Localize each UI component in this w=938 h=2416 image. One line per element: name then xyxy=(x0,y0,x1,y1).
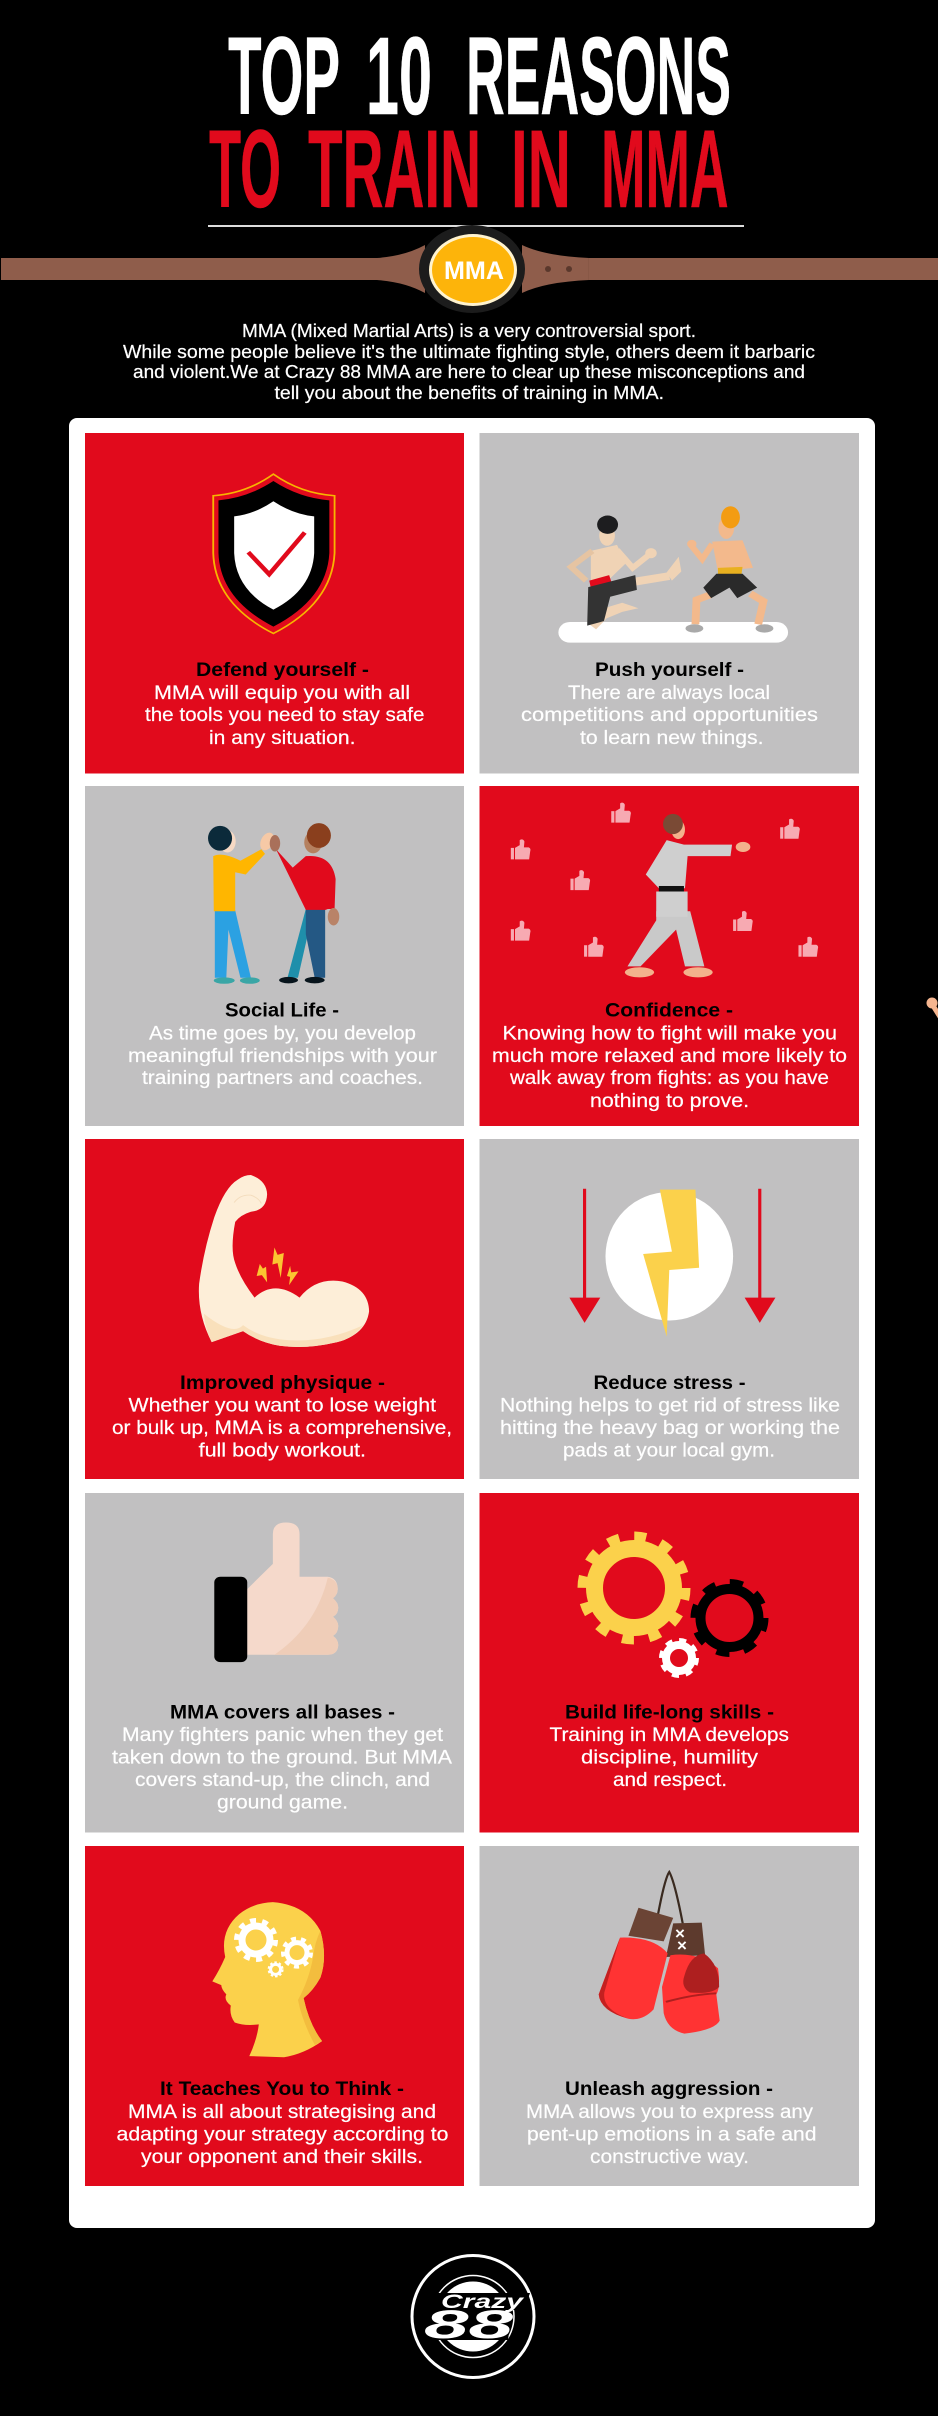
card text: discipline, humility xyxy=(581,1748,759,1769)
card: Improved physique xyxy=(85,1139,464,1479)
card text: ground game. xyxy=(217,1793,348,1814)
card text: Nothing helps to get rid of stress like xyxy=(500,1396,840,1416)
card: Push yourself xyxy=(480,433,859,774)
card text: taken down to the ground. But MMA xyxy=(112,1748,452,1769)
championship belt xyxy=(1,225,938,313)
card text: Training in MMA develops xyxy=(550,1725,789,1746)
title line: To Train in MMA: IN xyxy=(511,108,571,231)
card text: Unleash aggression - xyxy=(565,2079,773,2100)
icon: hanging boxing gloves xyxy=(599,1872,720,2034)
card text xyxy=(145,660,424,749)
belt label: MMA xyxy=(444,257,504,285)
glove laces: × xyxy=(675,1924,685,1943)
card text: Confidence - xyxy=(605,1000,733,1022)
card text: and respect. xyxy=(613,1770,727,1791)
card text: Defend yourself - xyxy=(196,660,369,681)
intro text: tell you about the benefits of training in MMA. xyxy=(274,383,664,403)
icon: head with gears xyxy=(212,1902,324,2057)
card text: competitions and opportunities xyxy=(521,705,818,726)
card: It Teaches You to Think xyxy=(85,1846,464,2186)
card text: adapting your strategy according to xyxy=(116,2124,448,2146)
card text: in any situation. xyxy=(209,728,356,749)
icon: three gears xyxy=(582,1536,764,1676)
intro text: While some people believe it's the ultimate fighting style, others deem it barbaric xyxy=(123,342,815,362)
card text xyxy=(112,1373,452,1462)
card text: your opponent and their skills. xyxy=(141,2147,423,2168)
card text: pent-up emotions in a safe and xyxy=(527,2124,816,2146)
card: Confidence xyxy=(480,786,859,1126)
card text: constructive way. xyxy=(590,2147,749,2168)
card text: walk away from fights: as you have xyxy=(509,1068,829,1089)
card text: It Teaches You to Think - xyxy=(160,2079,404,2100)
card: Reduce stress xyxy=(480,1139,859,1479)
icon: thumbs up surrounding a punching man xyxy=(511,803,818,977)
card text: covers stand-up, the clinch, and xyxy=(135,1770,430,1791)
card text: Reduce stress - xyxy=(594,1373,746,1394)
card text: to learn new things. xyxy=(580,728,764,749)
card text: Build life-long skills - xyxy=(565,1703,774,1724)
card text: the tools you need to stay safe xyxy=(145,705,424,726)
card text xyxy=(521,660,818,749)
card text: hitting the heavy bag or working the xyxy=(500,1418,840,1439)
card text: MMA will equip you with all xyxy=(154,683,410,704)
logo: Crazy 88 xyxy=(412,2256,534,2378)
card text: Improved physique - xyxy=(180,1373,385,1394)
cropped fist at right edge xyxy=(926,998,938,1020)
icon: shield xyxy=(213,474,335,633)
intro text: MMA (Mixed Martial Arts) is a very controversial sport. xyxy=(242,321,696,341)
card text: training partners and coaches. xyxy=(142,1068,423,1089)
intro text xyxy=(123,321,815,403)
icon: two friends high-fiving xyxy=(208,823,339,984)
icon: two fighters sparring xyxy=(558,506,788,643)
title line: Top 10 Reasons: TOP xyxy=(228,15,340,138)
card: Unleash aggression xyxy=(480,1846,859,2186)
card text: full body workout. xyxy=(199,1440,366,1462)
card text: meaningful friendships with your xyxy=(128,1046,438,1067)
logo number: 88: 88 xyxy=(424,2303,514,2347)
card text: MMA allows you to express any xyxy=(526,2102,814,2123)
card text: Social Life - xyxy=(225,1000,339,1022)
card text xyxy=(128,1000,438,1089)
title line: Top 10 Reasons xyxy=(228,15,731,138)
card text: Many fighters panic when they get xyxy=(122,1725,444,1746)
card text: Whether you want to lose weight xyxy=(128,1396,437,1416)
card text xyxy=(116,2079,448,2168)
text: MMA xyxy=(601,108,728,231)
glove laces: × xyxy=(677,1936,687,1955)
card text: As time goes by, you develop xyxy=(149,1023,416,1044)
title line: Top 10 Reasons: 10 xyxy=(366,15,432,138)
card text: or bulk up, MMA is a comprehensive, xyxy=(112,1418,452,1439)
title line: To Train in MMA: TRAIN xyxy=(308,108,481,231)
icon: flexed arm xyxy=(199,1175,369,1347)
panel: white card container xyxy=(69,418,875,2228)
card text xyxy=(112,1703,452,1814)
card: Defend yourself xyxy=(85,433,464,774)
card text xyxy=(526,2079,816,2168)
card text: pads at your local gym. xyxy=(563,1440,775,1462)
card text: much more relaxed and more likely to xyxy=(492,1046,847,1067)
icon: thumbs up xyxy=(214,1523,338,1662)
icon: lightning bolt and down arrows xyxy=(569,1189,775,1337)
card text: MMA covers all bases - xyxy=(170,1703,395,1724)
card: MMA covers all bases xyxy=(85,1493,464,1832)
card text: Push yourself - xyxy=(595,660,744,681)
title line: To Train in MMA: TO xyxy=(209,108,281,231)
logo word: crazy: Crazy xyxy=(441,2292,525,2313)
card text xyxy=(550,1703,789,1791)
card text: There are always local xyxy=(568,683,770,704)
card: Build life-long skills xyxy=(480,1493,859,1832)
card: Social Life xyxy=(85,786,464,1126)
card text xyxy=(492,1000,847,1112)
title xyxy=(209,15,731,231)
card text xyxy=(500,1373,840,1462)
card text: Knowing how to fight will make you xyxy=(502,1023,837,1044)
intro text: and violent.We at Crazy 88 MMA are here to clear up these misconceptions and xyxy=(133,362,805,382)
card text: MMA is all about strategising and xyxy=(128,2102,436,2123)
card text: nothing to prove. xyxy=(590,1091,749,1112)
title line: To Train in MMA xyxy=(209,108,728,231)
